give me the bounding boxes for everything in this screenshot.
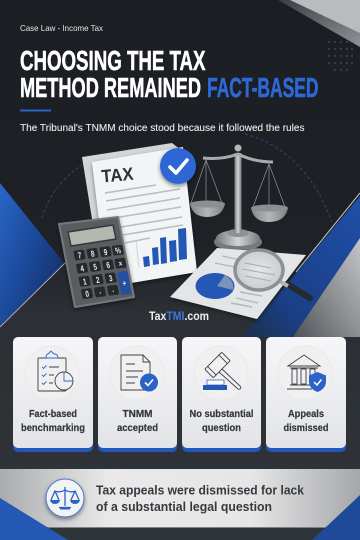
icon: check badge	[160, 148, 196, 184]
card label: No substantial	[190, 409, 254, 420]
illustration: calculator	[59, 217, 134, 307]
category label: Case Law - Income Tax	[20, 23, 104, 33]
illustration: calculator: 5	[92, 262, 99, 272]
right blue and grey diagonal band	[244, 193, 360, 337]
illustration: calculator: 4	[79, 263, 86, 274]
illustration: calculator: ×	[118, 258, 124, 269]
illustration: calculator: .	[98, 286, 102, 296]
TAX heading: TAX	[101, 164, 134, 186]
card: TNMM accepted	[98, 337, 177, 452]
card label: TNMM	[122, 409, 152, 420]
subtitle: The Tribunal's TNMM choice stood because it followed the rules	[20, 122, 304, 134]
card label: Fact-based	[29, 409, 77, 420]
illustration: balance scale	[190, 144, 288, 251]
icon: clipboard checklist	[38, 351, 73, 391]
document lines	[105, 185, 183, 243]
title	[20, 45, 318, 103]
card label: benchmarking	[21, 423, 85, 434]
card: no substantial question	[182, 337, 261, 452]
conclusion text: Tax appeals were dismissed for lack	[96, 482, 305, 498]
icon: courthouse with shield	[287, 355, 326, 392]
illustration: calculator: %	[114, 245, 122, 256]
site brand: TaxTMI.com	[149, 309, 209, 323]
title accent rule	[20, 110, 51, 112]
card label: accepted	[117, 423, 158, 434]
illustration: calculator: 1	[82, 276, 88, 287]
illustration: calculator: 6	[105, 260, 111, 271]
card label: Appeals	[288, 409, 324, 420]
dashed arcs	[42, 134, 332, 222]
illustration: calculator: 3	[108, 273, 113, 284]
left blue accent	[0, 183, 65, 327]
title: METHOD REMAINED	[20, 72, 201, 103]
top right corner accent	[278, 0, 360, 71]
icon: document with check	[121, 355, 158, 392]
card label: dismissed	[284, 423, 328, 434]
card: appeals dismissed	[266, 337, 346, 452]
illustration: tax document	[82, 143, 197, 287]
conclusion text: of a substantial legal question	[96, 499, 272, 514]
illustration: calculator: 0	[84, 289, 90, 299]
illustration: calculator: 9	[103, 247, 108, 257]
illustration: calculator: +	[122, 278, 128, 289]
illustration: calculator: 8	[90, 248, 95, 259]
card: fact-based benchmarking	[13, 337, 93, 452]
illustration: report with magnifier	[170, 248, 310, 319]
icon: magnifier	[235, 250, 310, 298]
bar chart	[143, 228, 187, 267]
illustration: calculator: .	[111, 284, 115, 294]
conclusion banner	[0, 469, 360, 540]
icon: scale badge	[46, 479, 84, 517]
icon: gavel	[203, 352, 241, 390]
title: CHOOSING THE TAX	[20, 45, 206, 76]
pie chart	[196, 273, 234, 299]
card label: question	[202, 423, 241, 434]
illustration: calculator: 7	[77, 250, 82, 261]
illustration: calculator: 2	[95, 275, 100, 285]
